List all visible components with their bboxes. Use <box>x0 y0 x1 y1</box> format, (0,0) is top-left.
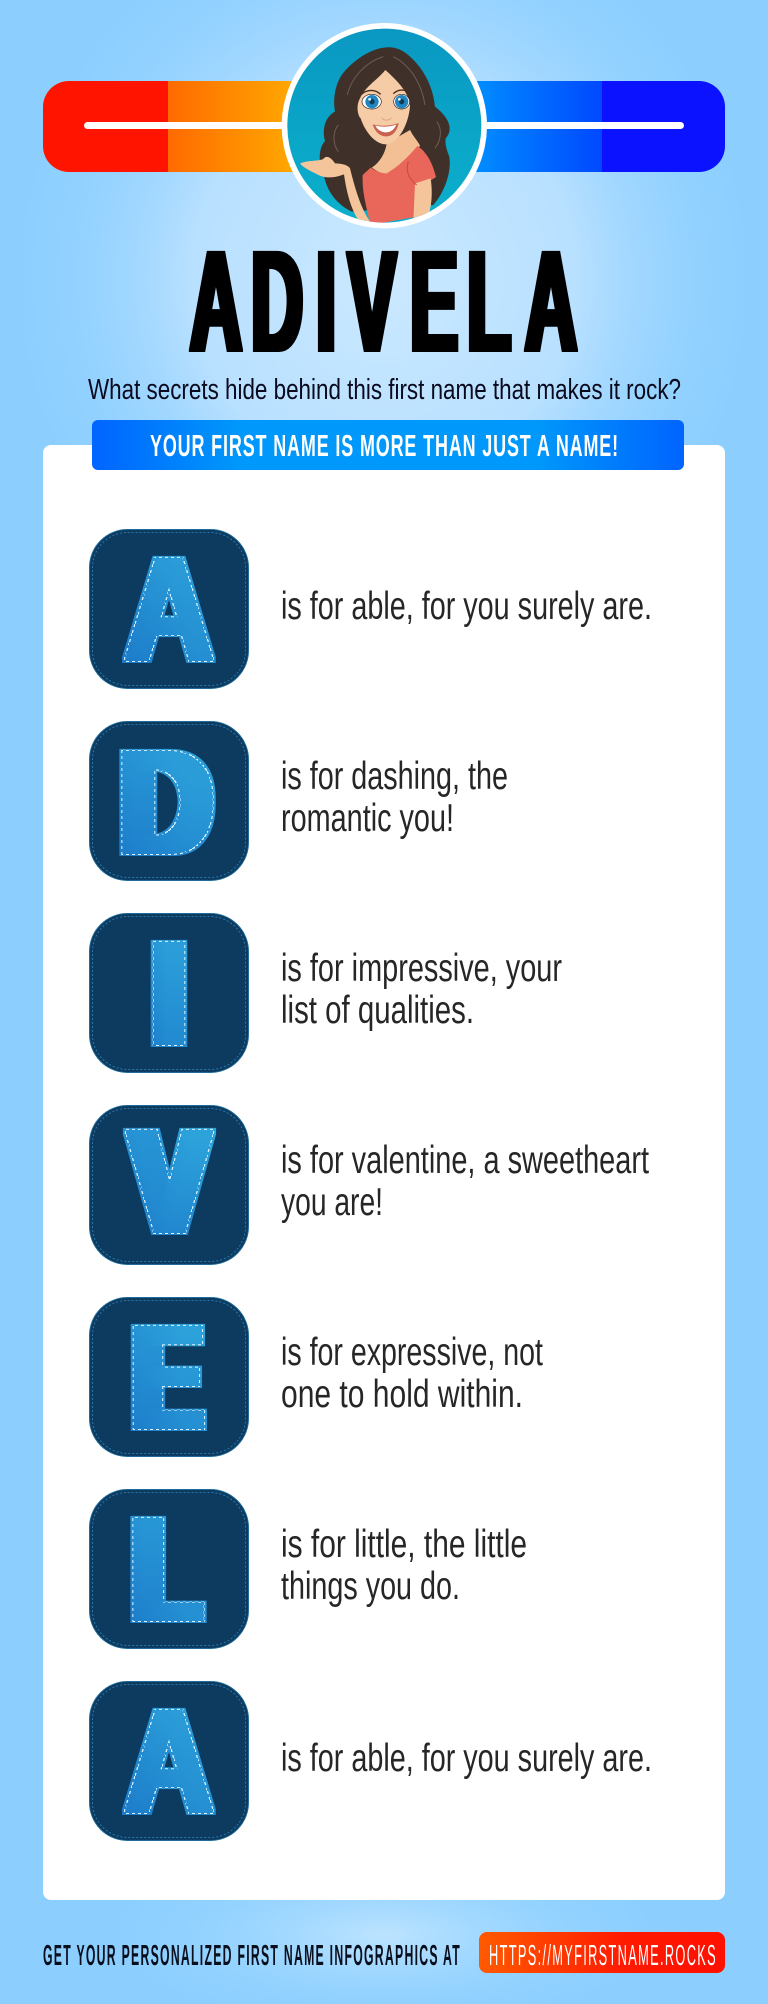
icon: letter L: L <box>133 1488 200 1652</box>
icon: letter E <box>90 1296 248 1460</box>
row: letter E (expressive): is for expressive, not <box>281 1331 543 1374</box>
icon: letter A <box>90 1680 248 1844</box>
icon: letter V: V <box>132 1100 207 1264</box>
row: letter E (expressive) <box>90 1296 543 1460</box>
eyebrows <box>361 90 381 95</box>
row: letter A (able, repeat) <box>90 1680 652 1844</box>
row: letter L (little) <box>90 1488 527 1652</box>
title: ADIVELA <box>190 222 577 383</box>
eyes <box>362 94 381 109</box>
row: letter I (impressive): is for impressive, your <box>281 947 562 990</box>
face <box>358 70 410 144</box>
footer url button <box>479 1932 725 1973</box>
nose <box>382 118 391 120</box>
icon: letter V <box>90 1100 248 1264</box>
colour bar header <box>43 81 725 172</box>
row: letter V (valentine): you are! <box>281 1181 383 1224</box>
hand and arm <box>300 156 370 222</box>
row: letter E (expressive): one to hold within. <box>281 1373 523 1416</box>
icon: letter L <box>90 1488 248 1652</box>
banner <box>92 420 684 470</box>
row: letter D (dashing): is for dashing, the <box>281 755 508 798</box>
right arm <box>413 178 432 222</box>
icon: letter A: A <box>125 1680 213 1844</box>
icon: letter I <box>90 912 248 1076</box>
row: letter I (impressive): list of qualities. <box>281 989 474 1032</box>
smile <box>373 123 399 136</box>
row: letter D (dashing): romantic you! <box>281 797 454 840</box>
shirt <box>363 146 436 225</box>
row: letter L (little): is for little, the little <box>281 1523 527 1566</box>
icon: letter D <box>90 721 248 885</box>
icon: letter A <box>90 528 248 692</box>
panel: white card <box>43 445 725 1900</box>
row: letter D (dashing) <box>90 721 508 885</box>
icon: letter A: A <box>125 528 213 692</box>
neck <box>372 130 420 175</box>
portrait: smiling woman in circle <box>282 23 487 228</box>
row: letter L (little): things you do. <box>281 1565 460 1608</box>
row: letter V (valentine) <box>90 1100 649 1264</box>
row: letter V (valentine): is for valentine, a sweetheart <box>281 1139 649 1182</box>
icon: letter I: I <box>153 912 185 1076</box>
row: letter A (able) <box>90 528 652 692</box>
icon: letter D: D <box>121 721 211 885</box>
icon: letter E: E <box>134 1296 201 1460</box>
row: letter I (impressive) <box>90 912 562 1076</box>
